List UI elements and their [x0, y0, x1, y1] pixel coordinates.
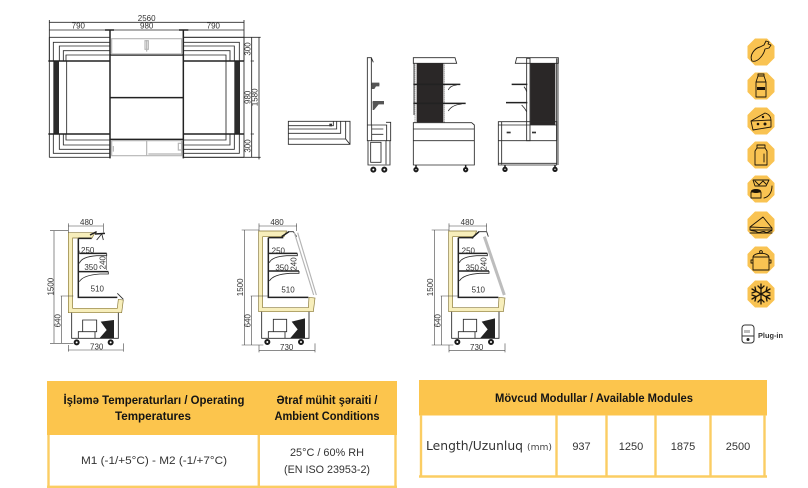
icon: sandwich: [748, 212, 774, 238]
section dimensions: 730: [90, 342, 104, 351]
table: available modules: [419, 380, 767, 476]
plan dimension labels: 790: [72, 22, 86, 31]
icon: plug-in unit: [742, 325, 754, 343]
rear elevation drawing: [498, 58, 558, 171]
section dimensions: 640: [54, 313, 63, 327]
plan dimension labels: [72, 14, 260, 153]
section dimensions: [426, 218, 488, 352]
section dimensions: 480: [80, 218, 94, 227]
corner detail drawing: [288, 121, 350, 144]
side elevation drawing: [367, 58, 391, 172]
icon: snowflake: [748, 280, 774, 308]
plan dimension labels: 300: [244, 139, 253, 153]
front elevation drawing: [413, 58, 474, 171]
plan dimension labels: 1580: [251, 88, 260, 106]
module length 937: 937: [572, 441, 591, 453]
section dimensions: 510: [281, 285, 295, 294]
operating temperature values: M1 (-1/+5°C) - M2 (-1/+7°C): [81, 455, 227, 467]
unit label: (mm): [527, 443, 552, 453]
icon: jar: [748, 142, 774, 168]
operating temperatures heading: Temperatures: [115, 411, 191, 423]
section dimensions: 350: [466, 263, 480, 272]
section dimensions: 480: [461, 218, 475, 227]
ambient conditions heading: Ambient Conditions: [274, 411, 380, 423]
section dimensions: 350: [275, 263, 289, 272]
plan dimension labels: 980: [244, 90, 253, 104]
plan dimension labels: 980: [140, 22, 154, 31]
section dimensions: 510: [472, 285, 486, 294]
section dimensions: 640: [244, 313, 253, 327]
icon: mixed dishes: [748, 176, 774, 202]
ambient condition values: 25°C / 60% RH: [290, 447, 364, 459]
section drawing: double glazed model: [236, 218, 316, 352]
plan dimension labels: 790: [207, 22, 221, 31]
section dimensions: 1500: [46, 277, 55, 296]
plan dimension labels: 2560: [138, 14, 156, 23]
section drawing: open model: [46, 218, 123, 352]
section dimensions: 640: [434, 313, 443, 327]
section drawing: single glazed model: [426, 218, 505, 352]
operating temperatures heading: İşləmə Temperaturları / Operating: [64, 394, 244, 407]
section dimensions: 240: [479, 257, 488, 271]
table: operating temperatures and ambient conditions: [47, 381, 397, 487]
section dimensions: 730: [470, 343, 484, 352]
section dimensions: 1500: [236, 278, 245, 296]
section dimensions: 240: [289, 257, 298, 271]
ambient conditions heading: Ətraf mühit şəraiti /: [276, 395, 378, 407]
plan dimension labels: 300: [244, 42, 253, 56]
section dimensions: [236, 218, 298, 352]
icon: milk carton: [748, 72, 774, 100]
section dimensions: 480: [270, 218, 284, 227]
section dimensions: 730: [280, 343, 294, 352]
ambient condition values: (EN ISO 23953-2): [284, 464, 370, 476]
section dimensions: 250: [81, 246, 95, 255]
module length 1875: 1875: [671, 441, 695, 453]
section dimensions: 250: [462, 246, 476, 255]
length row label: Length/Uzunluq: [426, 438, 523, 453]
icon: poultry leg: [748, 38, 774, 66]
module length 2500: 2500: [726, 441, 750, 453]
icon: cooking pot: [748, 246, 774, 274]
section dimensions: 240: [99, 255, 108, 269]
icon: cheese: [748, 108, 774, 134]
section dimensions: 250: [272, 246, 286, 255]
plan view drawing: [48, 14, 261, 159]
section dimensions: [46, 218, 108, 351]
section dimensions: 350: [84, 263, 98, 272]
section dimensions: 510: [91, 285, 105, 294]
module length 1250: 1250: [619, 441, 643, 453]
modules heading: Mövcud Modullar / Available Modules: [495, 393, 693, 405]
plug-in label: Plug-in: [758, 331, 783, 340]
section dimensions: 1500: [426, 278, 435, 296]
